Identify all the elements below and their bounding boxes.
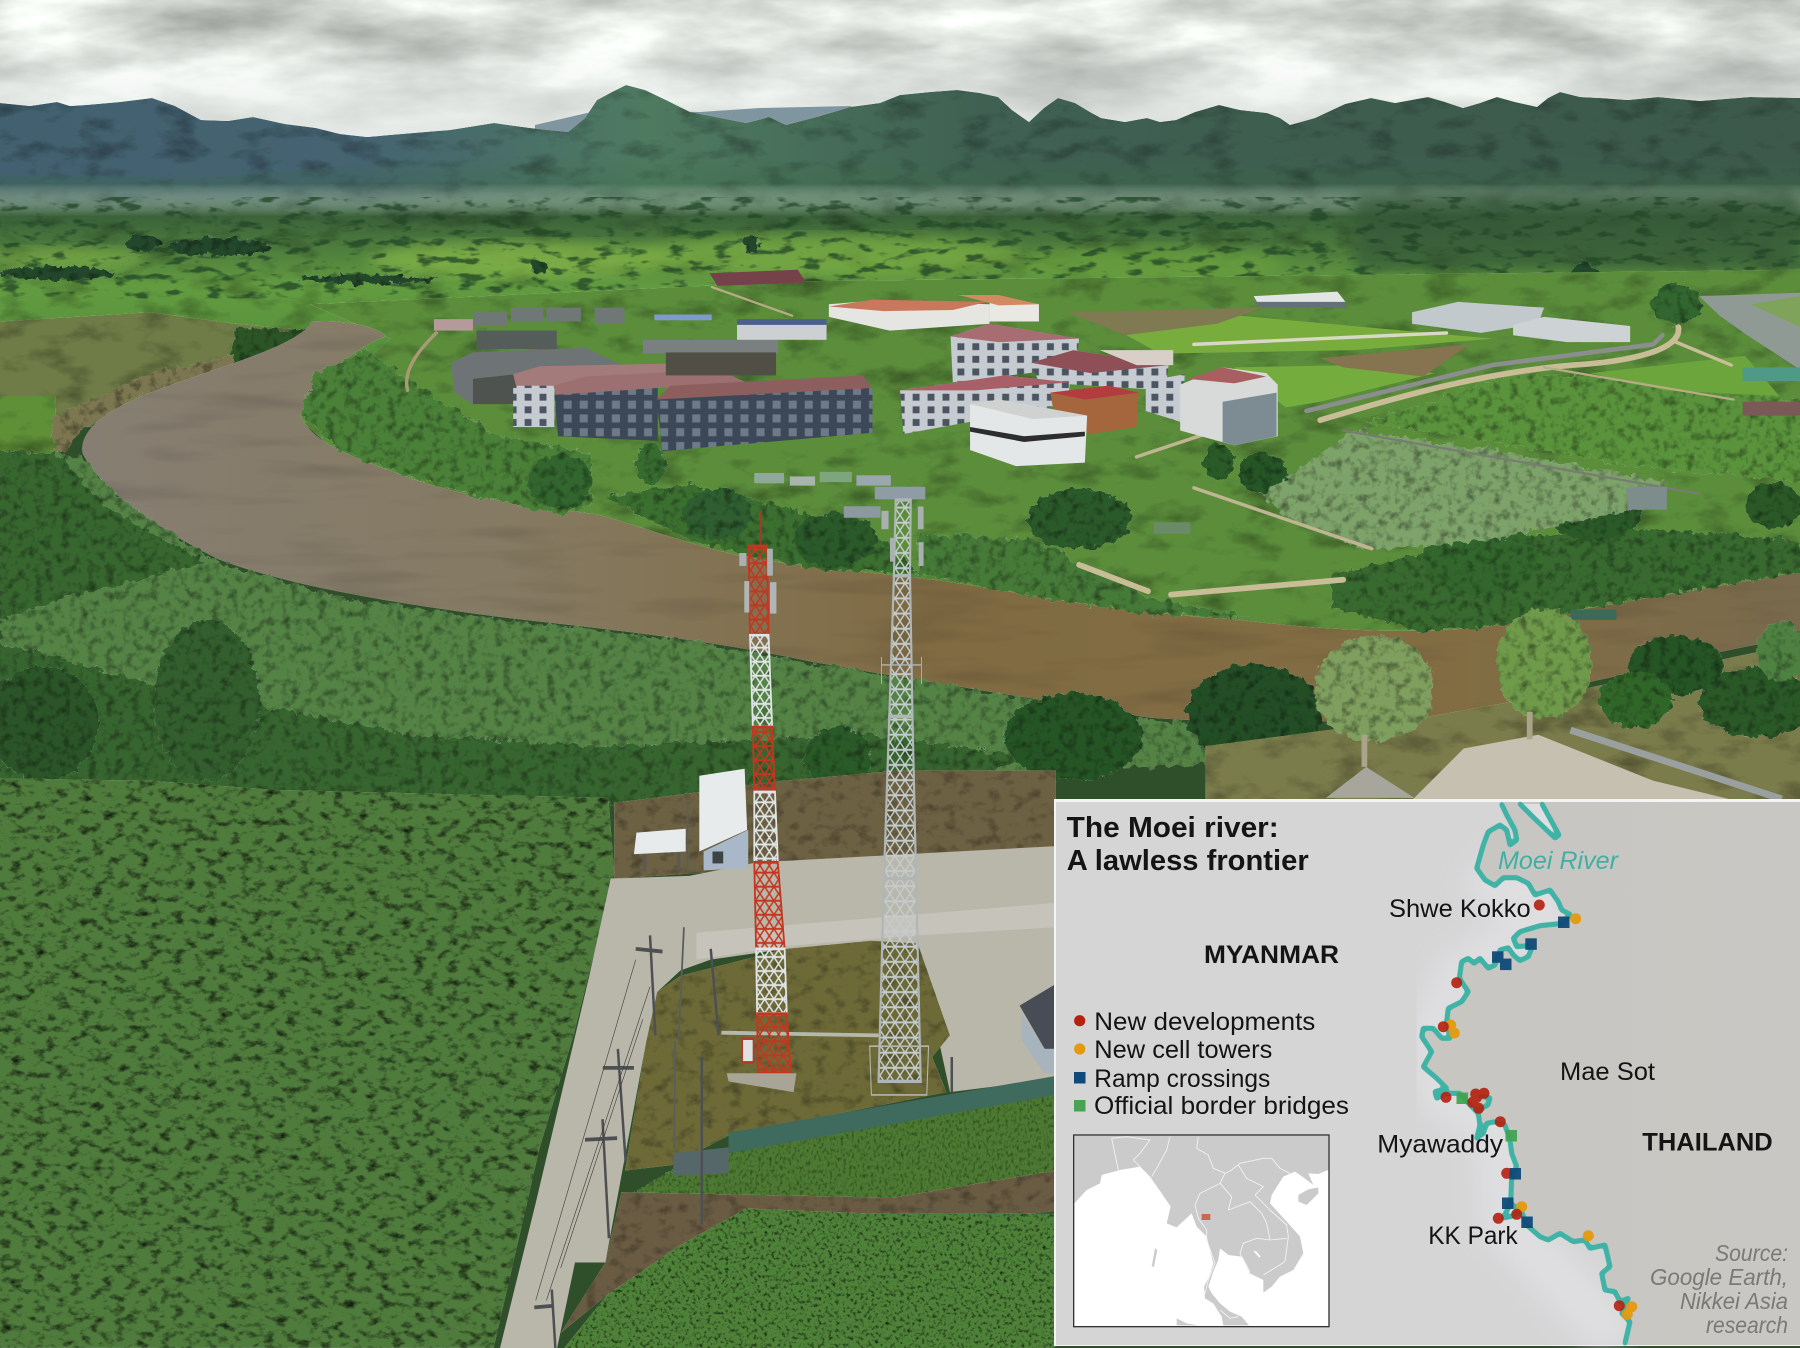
legend: official border bridges: Official border bridges [1094,1092,1349,1120]
right-hand meadows with white flowers [1068,308,1800,551]
Tonle Sap lake [1253,1251,1261,1258]
source credit: Google Earth, [1650,1264,1788,1290]
legend [1074,1008,1349,1120]
small building, right [1020,984,1056,1073]
label: Shwe Kokko: Shwe Kokko [1389,895,1531,923]
far-left riverside field [0,312,310,471]
upper river loop interior [1520,804,1559,838]
map title [1067,812,1309,877]
open shelter [634,829,686,872]
low-rise cottages [434,308,827,375]
country borders [1112,1137,1290,1318]
legend: new cell towers: New cell towers [1094,1036,1272,1064]
apartment complex, left [451,348,872,451]
panel background, Myanmar side [1056,802,1800,1345]
label: MYANMAR: MYANMAR [1204,941,1339,969]
concrete light strips [696,903,1056,960]
red and white telecom tower [727,511,796,1092]
official border bridges [1456,1092,1517,1142]
equipment shed [699,769,748,870]
tower blocks, centre [900,324,1278,466]
tower site, detailed foreground [500,500,1056,1348]
red-roofed block row, far [709,270,1039,331]
utility poles and wires [534,803,952,1348]
inset locator map of Southeast Asia [1074,1135,1329,1327]
mountain range [0,85,1800,225]
label: Mae Sot: Mae Sot [1560,1058,1655,1086]
green verge [625,1092,1056,1200]
locator rectangle [1202,1214,1210,1220]
central scrub plot [625,941,950,1171]
label: Moei River: Moei River [1498,847,1620,875]
riverside shanties [754,472,1616,620]
distant mountains [535,106,900,160]
upper-right river section [1699,293,1800,370]
map panel: The Moei river [1054,799,1800,1346]
source credit [1650,1240,1788,1338]
cell towers [1445,913,1637,1320]
sugar cane field, left foreground [0,778,614,1348]
lower cane field [564,1208,1056,1348]
panel white edge [1054,799,1800,1346]
legend: ramp crossings: Ramp crossings [1094,1065,1270,1093]
label: KK Park: KK Park [1428,1222,1518,1250]
green perimeter fence [729,1076,1056,1153]
source credit: Nikkei Asia [1680,1288,1788,1314]
foreground river-bank vegetation [0,450,1320,804]
map title: The Moei river: [1067,812,1279,844]
legend: new developments: New developments [1094,1008,1315,1036]
developed bank base [293,270,1800,637]
ramp crossings [1492,916,1570,1228]
map title: A lawless frontier [1067,845,1309,877]
roads and perimeter fence [407,287,1733,595]
river-bank forest, left of the development [301,284,1800,631]
glow along the Myanmar bank [1435,868,1620,1340]
inset frame [1074,1135,1329,1327]
ground and trees, right foreground [1205,608,1800,804]
label: THAILAND: THAILAND [1642,1129,1773,1157]
concrete yard and access road [500,846,1056,1348]
mainland land mass [1074,1136,1328,1325]
map markers [1438,900,1637,1320]
source credit: research [1706,1312,1788,1338]
Moei river line [1422,804,1630,1343]
label: Myawaddy: Myawaddy [1377,1131,1504,1159]
grey lattice telecom tower [870,500,929,1095]
Hainan and islands [1152,1187,1318,1325]
sky with clouds [0,0,1800,160]
Moei river [82,321,1800,721]
valley fields [0,184,1800,388]
dirt track [561,1171,1056,1333]
sheds and wings, right [1254,292,1800,510]
brown scrub ground [614,770,1056,879]
Thailand land area [1422,802,1800,1345]
new developments [1438,900,1625,1311]
source credit: Source: [1715,1240,1788,1266]
